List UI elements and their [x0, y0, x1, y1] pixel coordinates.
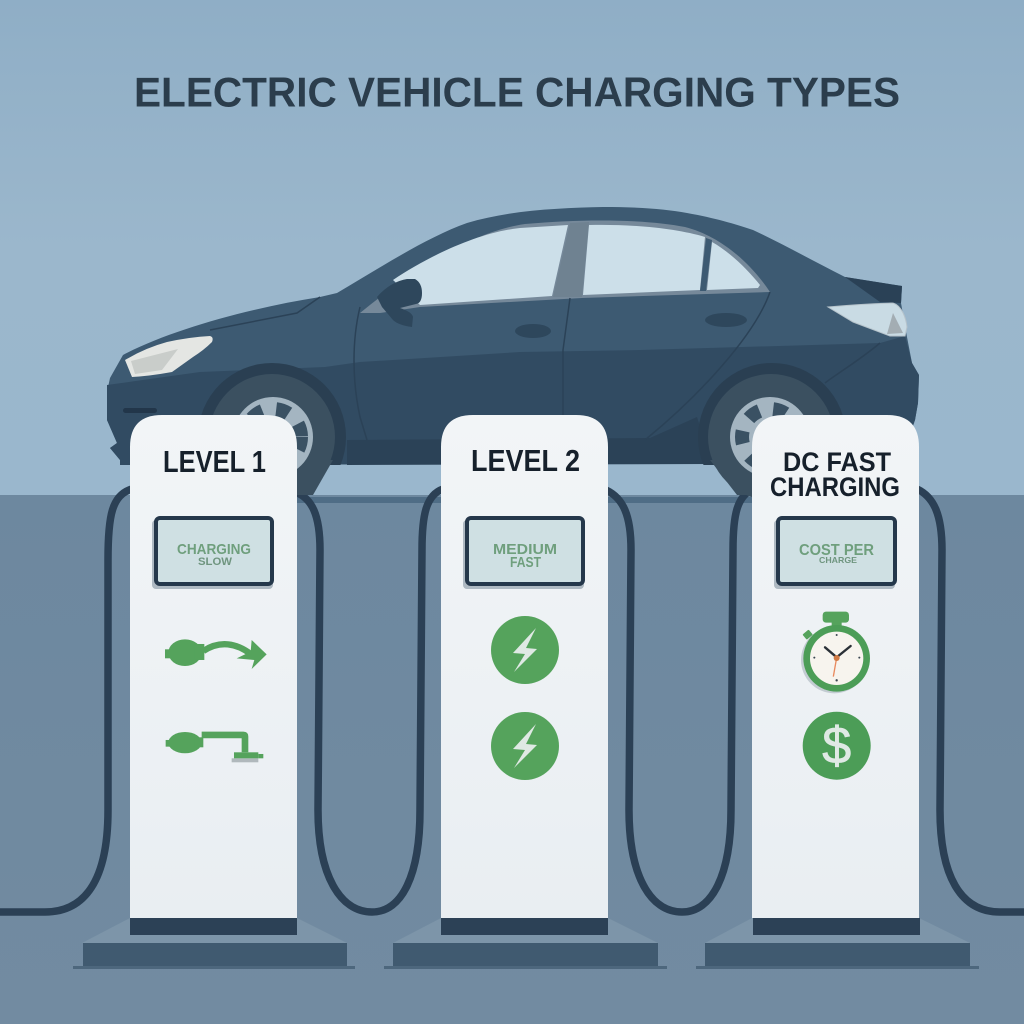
icon: lightning bolt	[491, 616, 559, 684]
screen: charging slow: SLOW	[198, 556, 233, 568]
base: level 2	[384, 918, 667, 969]
card body: level 2	[441, 415, 608, 918]
screen: cost per charge: CHARGE	[819, 555, 857, 565]
car sill	[347, 417, 712, 465]
screen: medium fast	[463, 518, 584, 589]
screen: medium fast: MEDIUM	[493, 541, 557, 558]
icon: lightning bolt second	[491, 712, 559, 780]
heading: dc fast charging	[770, 447, 900, 502]
icon: plug with arrow	[165, 639, 267, 669]
door handles	[515, 324, 551, 338]
title: ELECTRIC VEHICLE CHARGING TYPES	[134, 68, 900, 116]
front wheel	[202, 363, 346, 495]
front window	[393, 225, 568, 305]
headlight	[125, 336, 213, 377]
rear wheel	[700, 363, 842, 497]
base: dc fast	[696, 918, 979, 969]
icon: dollar coin	[803, 712, 871, 780]
heading: level 1: LEVEL 1	[163, 444, 266, 479]
card body: level 1	[130, 415, 297, 918]
door pillar	[553, 222, 589, 297]
panel: dc fast charging	[696, 415, 979, 969]
tail light	[828, 303, 907, 336]
car	[107, 207, 919, 511]
quarter window divider	[700, 238, 712, 291]
car body	[107, 207, 919, 465]
side mirror	[377, 279, 422, 327]
body lines	[210, 292, 880, 445]
icon: plug with connector	[166, 732, 263, 762]
icon: stopwatch	[801, 612, 870, 693]
heading: level 2: LEVEL 2	[471, 443, 580, 478]
spoiler	[845, 277, 902, 303]
base: level 1	[73, 918, 355, 969]
window trim	[360, 220, 770, 313]
heading: dc fast charging: CHARGING	[770, 472, 900, 502]
screen: charging slow: CHARGING	[177, 541, 251, 558]
heading: dc fast charging: DC FAST	[783, 447, 891, 477]
rear window	[583, 225, 705, 295]
screen: cost per charge: COST PER	[799, 542, 874, 559]
panel: level 1 charger	[73, 415, 355, 969]
bumper vent	[123, 408, 157, 413]
charging cables	[0, 489, 1024, 912]
ground floor	[0, 495, 1024, 1024]
panel: level 2 charger	[384, 415, 667, 969]
card body: dc fast	[752, 415, 919, 918]
screen: medium fast: FAST	[510, 554, 541, 571]
car lower body shade	[107, 336, 919, 465]
icon: dollar coin: $	[822, 717, 851, 775]
quarter window	[707, 242, 760, 290]
screen: cost per charge	[774, 518, 895, 589]
screen: charging slow	[152, 518, 273, 589]
background sky	[0, 0, 1024, 495]
